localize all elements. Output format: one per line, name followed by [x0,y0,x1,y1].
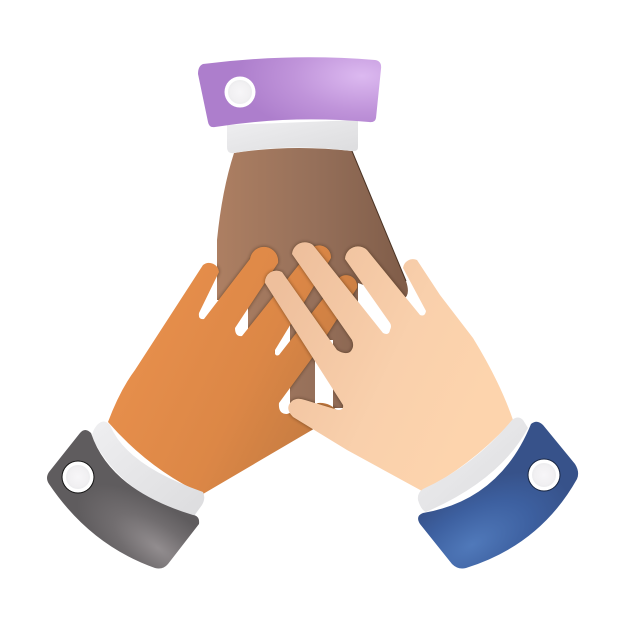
brown hand [217,148,408,408]
sleeve button [62,460,94,494]
illustration: three stacked hands [47,57,578,568]
white shirt cuff [92,422,204,516]
hand: top brown hand with purple cuff [198,57,408,408]
hand: right peach hand with blue cuff [265,242,578,568]
blue sleeve cuff [418,422,578,568]
peach hand [265,242,513,491]
gray sleeve cuff [47,430,199,568]
white shirt cuff [418,418,528,512]
sleeve button [224,76,256,108]
purple sleeve cuff [198,57,381,127]
hand: left orange hand with gray cuff [47,245,357,569]
sleeve button [528,458,560,492]
white shirt cuff [227,120,358,153]
orange hand [108,245,357,494]
